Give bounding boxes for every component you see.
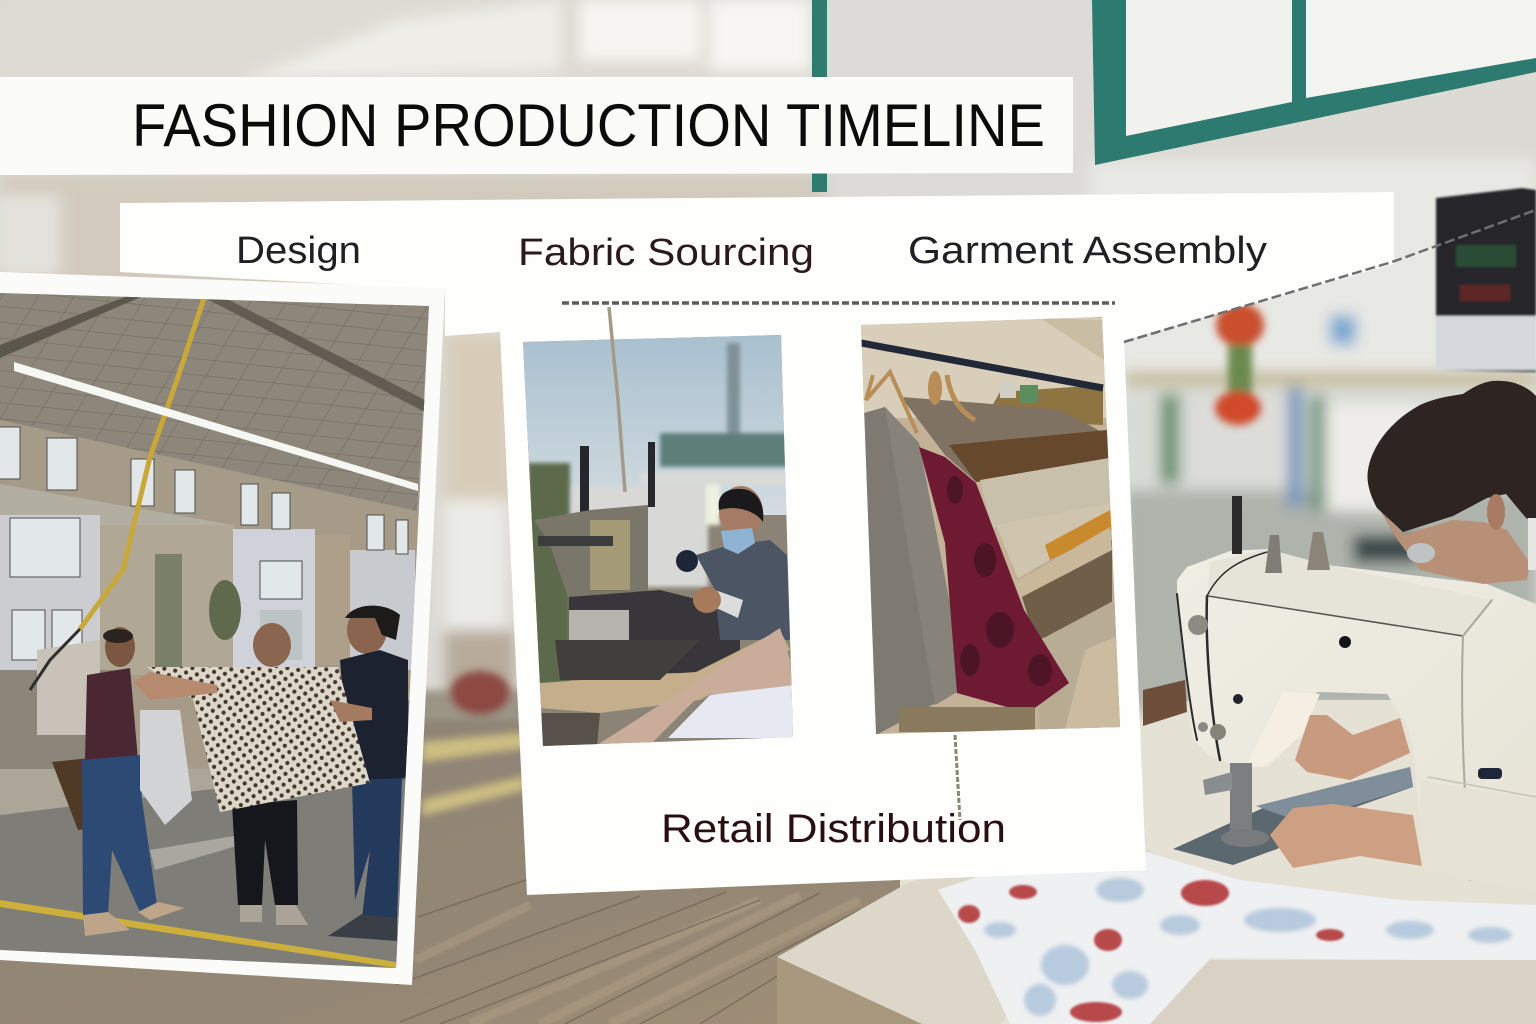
machine base overlap — [1420, 780, 1536, 891]
dashed wire to the right edge — [1124, 210, 1536, 342]
dashed drop line to retail — [955, 735, 960, 820]
step label: Design: Design — [236, 230, 361, 272]
photo card: fabric inspection — [0, 272, 445, 985]
photo: garments on rack — [860, 317, 1122, 735]
seamstress — [1270, 381, 1536, 868]
step label: Garment Assembly: Garment Assembly — [908, 230, 1267, 272]
dashed timeline connector — [562, 301, 1115, 305]
step label: Fabric Sourcing: Fabric Sourcing — [518, 232, 814, 274]
wall display board — [1436, 188, 1536, 372]
red hanging decoration — [1215, 303, 1264, 425]
title banner — [0, 77, 1073, 175]
machine needle plate and presser foot — [1173, 763, 1413, 865]
title text: FASHION PRODUCTION TIMELINE — [132, 92, 1045, 159]
background floor with wood planks — [0, 671, 1136, 1024]
cutting table — [777, 680, 1536, 1024]
hanging rope — [609, 307, 625, 492]
sewing machine — [1177, 496, 1536, 891]
central white timeline panel — [120, 192, 1394, 895]
photo: fabric machine operator — [520, 335, 800, 746]
people — [82, 606, 408, 941]
floral fabric — [938, 852, 1536, 1024]
window frame: green mullions — [812, 0, 1536, 192]
step label: Retail Distribution: Retail Distribution — [661, 807, 1006, 851]
